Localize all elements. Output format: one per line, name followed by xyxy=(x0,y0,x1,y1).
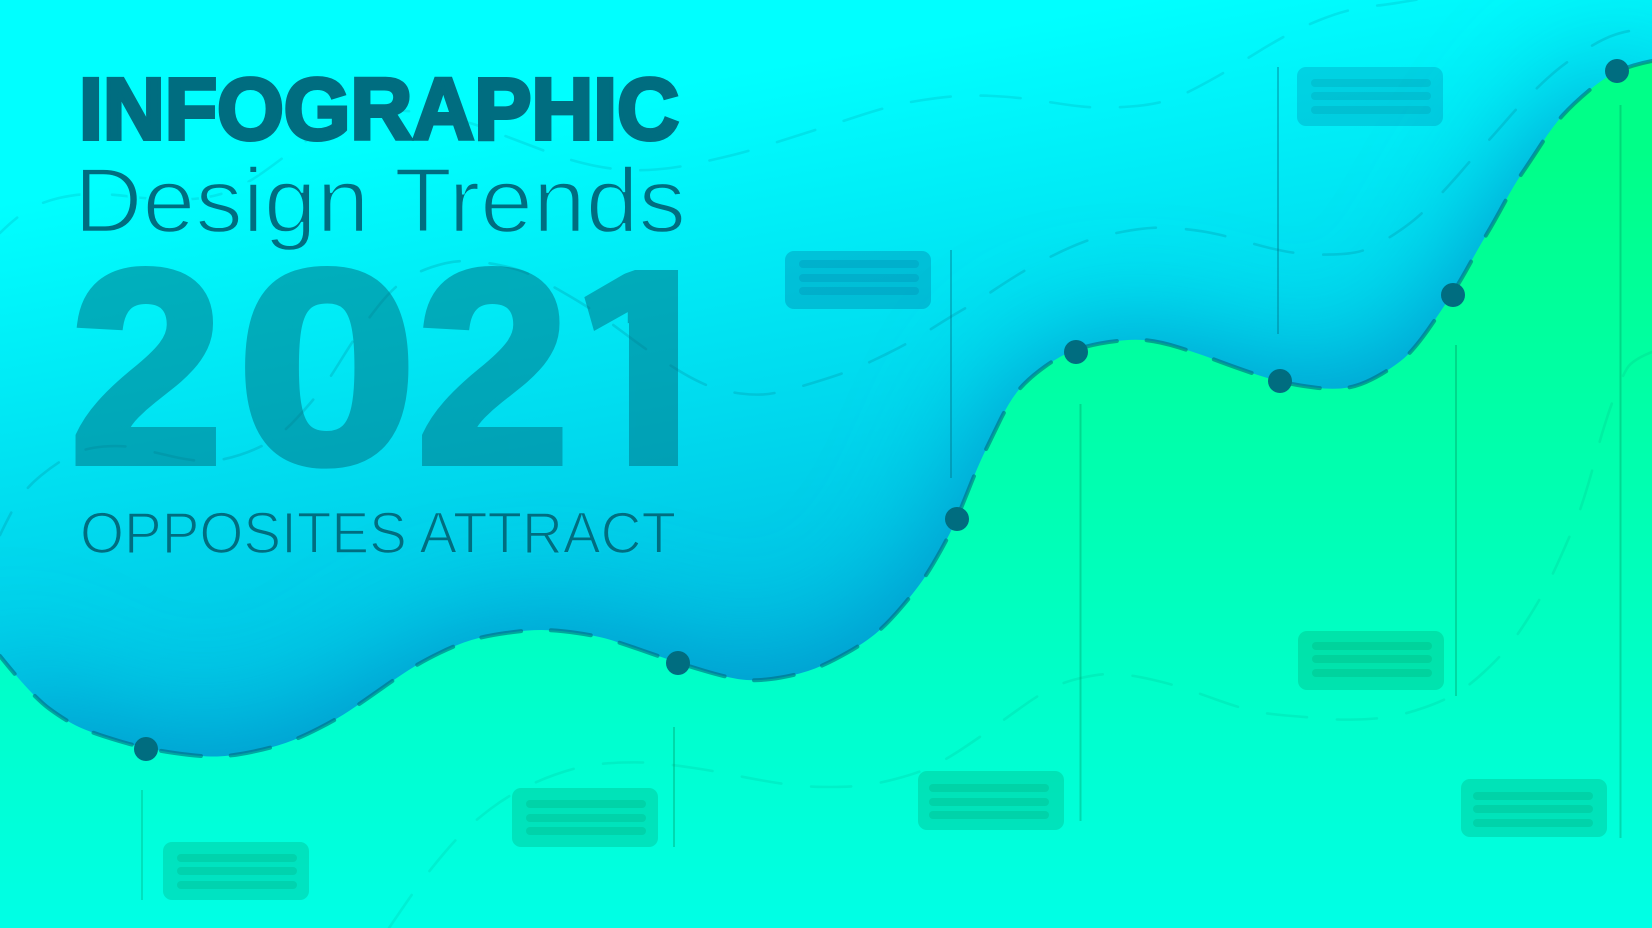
card: green note 3 xyxy=(918,771,1064,830)
dashed curve: middle faint trend xyxy=(0,28,1652,535)
heading: 2021: 0 xyxy=(237,214,417,521)
heading: INFOGRAPHIC: INFOGRAPHIC xyxy=(79,61,679,158)
card: green note 2 xyxy=(512,788,658,847)
blue-side chart annotations xyxy=(785,67,1443,478)
data point 3 xyxy=(945,507,969,531)
card: green note 4 xyxy=(1298,631,1444,690)
leader line: green 5 xyxy=(1620,105,1622,838)
leader line: green 1 xyxy=(141,790,143,900)
card: blue note 1 xyxy=(785,251,931,309)
data point 7 xyxy=(1605,59,1629,83)
dashed curve: lower faint trend xyxy=(389,352,1652,928)
leader line: blue 2 xyxy=(1277,67,1279,334)
title text block xyxy=(76,76,682,553)
card: blue note 2 xyxy=(1297,67,1443,126)
heading: 2021: 2 xyxy=(70,214,223,521)
data point 6 xyxy=(1441,283,1465,307)
leader line: blue 1 xyxy=(950,250,952,478)
data point 2 xyxy=(666,651,690,675)
main dashed curve xyxy=(0,61,1652,757)
heading: 2021: 1 xyxy=(560,214,732,521)
leader line: green 2 xyxy=(673,727,675,847)
dashed curve: upper faint trend xyxy=(0,0,1450,233)
green-side chart annotations xyxy=(141,105,1622,900)
data point 1 xyxy=(134,737,158,761)
card: green note 1 xyxy=(163,842,309,900)
heading: 2021: 2 xyxy=(416,214,570,521)
leader line: green 3 xyxy=(1080,404,1082,821)
data point 4 xyxy=(1064,340,1088,364)
card: green note 5 xyxy=(1461,779,1607,837)
tagline: OPPOSITES ATTRACT: OPPOSITES ATTRACT xyxy=(80,501,676,566)
leader line: green 4 xyxy=(1455,345,1457,696)
data points xyxy=(134,59,1629,761)
heading: Design Trends: Design Trends xyxy=(74,150,686,252)
data point 5 xyxy=(1268,369,1292,393)
